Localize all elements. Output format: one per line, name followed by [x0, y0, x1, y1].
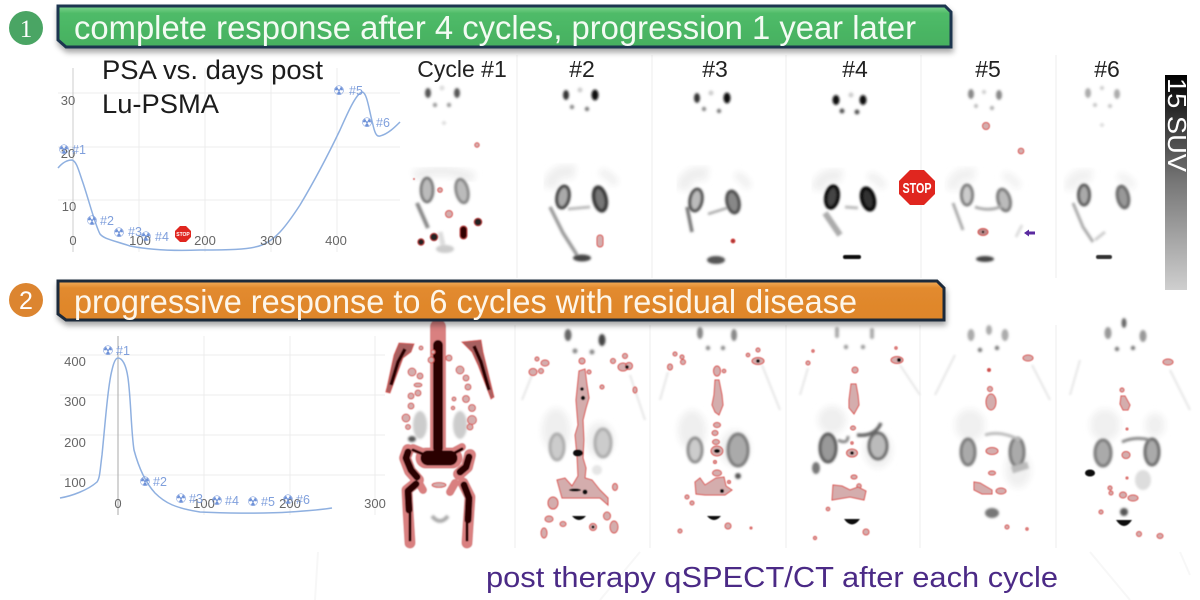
axis labels: 30 — [61, 93, 75, 108]
chart: PSA response patient 2 — [60, 336, 386, 515]
background faint lines — [315, 552, 1190, 600]
chart: PSA response patient 1 — [58, 68, 400, 252]
axis labels: 100 — [193, 496, 215, 511]
icon: small stop sign — [175, 226, 191, 242]
step badge 2 — [9, 283, 43, 317]
colour bar: 15 SUV: 15 SUV — [1162, 78, 1192, 173]
cycle markers: #6 — [296, 493, 310, 507]
axis labels: 0 — [69, 233, 77, 248]
axis labels: 0 — [114, 496, 122, 511]
icon: purple arrow — [1024, 230, 1035, 236]
scan row 1 cycle 1 — [413, 86, 482, 253]
icon: large stop sign — [899, 170, 935, 205]
cycle markers: ☢ — [282, 493, 294, 508]
cycle markers: #4 — [225, 494, 239, 508]
axis labels: 100 — [64, 475, 86, 490]
panel dividers — [515, 55, 1056, 548]
scan row 1 cycle 3 — [683, 90, 748, 264]
axis labels: 300 — [260, 233, 282, 248]
column headers: Cycle #1 — [417, 56, 507, 82]
cycle markers: #3 — [128, 225, 142, 239]
cycle markers: ☢ — [58, 143, 70, 158]
cycle markers: ☢ — [113, 226, 125, 241]
chart title: Lu-PSMA — [102, 89, 219, 119]
cycle markers: #6 — [376, 116, 390, 130]
scan row 1 cycle 5 — [952, 89, 1024, 262]
axis labels: 300 — [64, 394, 86, 409]
caption: post therapy qSPECT/CT after each cycle — [486, 562, 1058, 594]
axis labels: 300 — [364, 496, 386, 511]
cycle markers — [102, 344, 310, 510]
cycle markers: ☢ — [333, 84, 345, 99]
scan row 2 cycle 1 — [386, 322, 502, 550]
scan row 2 cycle 4 — [806, 327, 903, 540]
banner 2: progressive response to 6 cycles with residual disease — [74, 283, 857, 320]
scan row 2 cycle 2 — [529, 329, 637, 538]
cycle markers: #5 — [261, 495, 275, 509]
cycle markers: ☢ — [361, 116, 373, 131]
column headers: #4 — [842, 56, 868, 82]
banner 1: complete response after 4 cycles, progression 1 year later — [74, 9, 916, 46]
axis labels: 20 — [61, 146, 75, 161]
chart title — [102, 55, 324, 119]
scan row 2 cycle 5 — [955, 325, 1033, 530]
cycle markers: #1 — [72, 143, 86, 157]
cycle markers: ☢ — [140, 230, 152, 245]
cycle markers: ☢ — [247, 495, 259, 510]
cycle markers: #2 — [153, 475, 167, 489]
humeri — [386, 343, 414, 393]
colour bar: 15 SUV — [1162, 75, 1192, 290]
cycle markers: ☢ — [175, 492, 187, 507]
scan row 1 cycle 4 — [818, 92, 883, 259]
cycle markers: ☢ — [211, 494, 223, 509]
step badge 1: 1 — [20, 16, 32, 43]
skeleton halo — [405, 327, 470, 543]
cycle markers: #5 — [349, 84, 363, 98]
column headers: #3 — [702, 56, 728, 82]
axis labels: 400 — [64, 354, 86, 369]
scan row 1 cycle 2 — [550, 88, 615, 262]
axis labels: 10 — [62, 199, 76, 214]
chart title: PSA vs. days post — [102, 55, 324, 85]
cycle markers: #2 — [100, 214, 114, 228]
icon: large stop sign: STOP — [902, 180, 932, 197]
axis labels: 400 — [325, 233, 347, 248]
axis labels: 200 — [64, 435, 86, 450]
cycle markers: #3 — [189, 492, 203, 506]
column headers: #6 — [1094, 56, 1120, 82]
cycle markers: ☢ — [139, 475, 151, 490]
axis labels — [64, 354, 386, 511]
cycle markers — [58, 84, 390, 245]
axis labels: 100 — [129, 233, 151, 248]
column headers: #2 — [569, 56, 595, 82]
scan row 2 cycle 6 — [1085, 318, 1173, 538]
column headers: #5 — [975, 56, 1001, 82]
cycle markers: ☢ — [102, 344, 114, 359]
axis labels: 200 — [194, 233, 216, 248]
scan row 2 cycle 3 — [668, 327, 764, 533]
cycle markers: #4 — [155, 230, 169, 244]
scan row 1 cycle 6 — [1070, 86, 1133, 259]
faint arm traces row 2 — [522, 355, 1190, 420]
axis labels — [61, 93, 347, 248]
cycle markers: #1 — [116, 344, 130, 358]
rib lesions — [402, 346, 476, 488]
step badge 2: 2 — [19, 287, 33, 315]
step badge 1 — [9, 11, 43, 45]
icon: small stop sign: STOP — [176, 232, 190, 238]
cycle markers: ☢ — [86, 214, 98, 229]
axis labels: 200 — [279, 496, 301, 511]
column headers — [417, 56, 1120, 82]
